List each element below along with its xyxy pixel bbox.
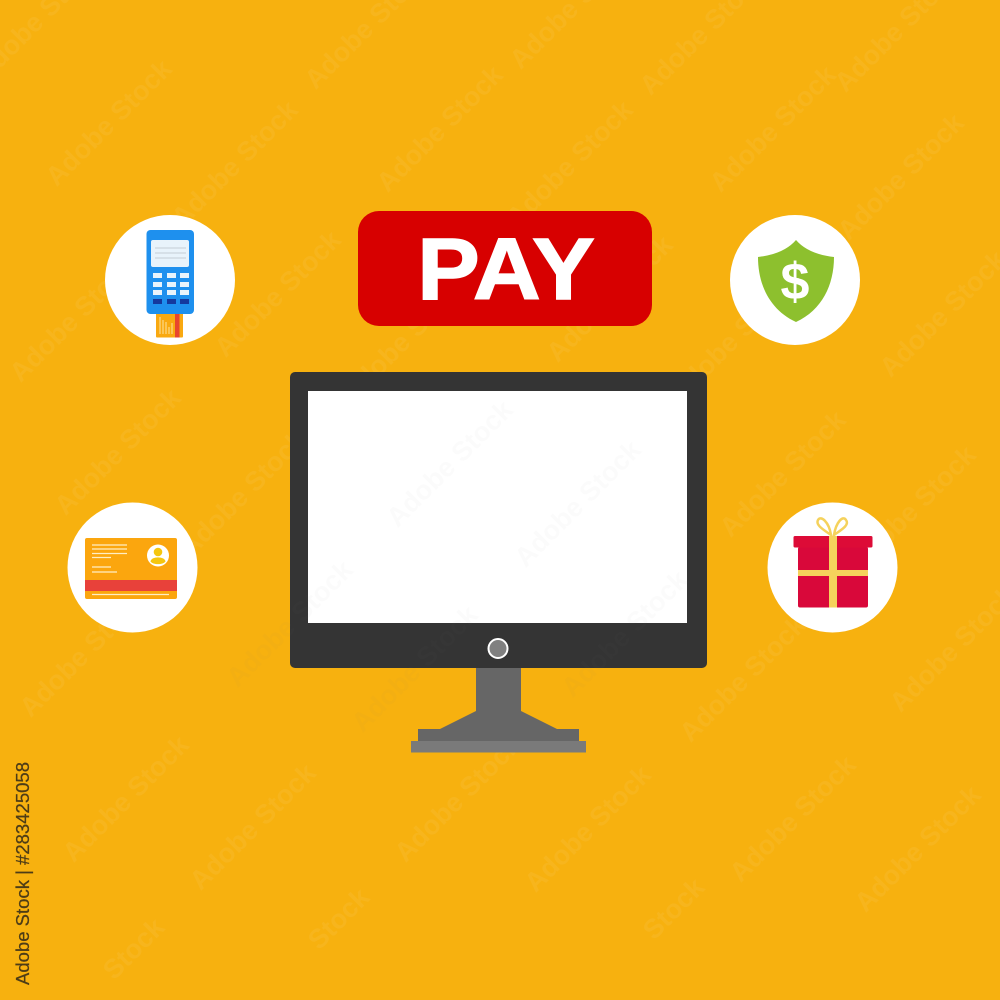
icon: credit card bbox=[68, 502, 198, 632]
text: Adobe Stock bbox=[14, 584, 152, 723]
text: Adobe Stock bbox=[832, 107, 970, 246]
card stripe bbox=[85, 580, 177, 591]
text: Adobe Stock bbox=[664, 269, 802, 408]
text: Adobe Stock bbox=[849, 779, 987, 918]
text: Adobe Stock bbox=[714, 404, 852, 543]
icon: security shield bbox=[730, 215, 860, 345]
pay label: PAY bbox=[417, 221, 595, 318]
text: Adobe Stock bbox=[174, 424, 312, 563]
text: Stock bbox=[637, 871, 711, 945]
text: Adobe Stock bbox=[57, 729, 195, 868]
text: Adobe Stock bbox=[49, 382, 187, 521]
text: Adobe Stock bbox=[704, 59, 842, 198]
text: Adobe Stock bbox=[724, 749, 862, 888]
text: Stock bbox=[97, 911, 171, 985]
text: Adobe Stock bbox=[501, 94, 639, 233]
text: Adobe Stock bbox=[674, 609, 812, 748]
dollar sign: $ bbox=[781, 253, 810, 311]
monitor screen bbox=[308, 391, 687, 623]
keypad bbox=[153, 273, 189, 304]
ribbon bbox=[798, 536, 868, 608]
watermark over monitor: Adobe Stock bbox=[221, 554, 359, 693]
text: Adobe Stock bbox=[389, 729, 527, 868]
terminal body bbox=[146, 230, 194, 314]
text: Adobe Stock bbox=[371, 59, 509, 198]
text: Adobe Stock bbox=[166, 94, 304, 233]
watermark over monitor bbox=[221, 394, 694, 738]
text: Adobe Stock bbox=[4, 249, 142, 388]
box body bbox=[798, 547, 868, 608]
watermark over monitor: Adobe Stock bbox=[381, 394, 519, 533]
text: Adobe Stock bbox=[336, 269, 474, 408]
card body bbox=[85, 538, 177, 599]
monitor body bbox=[290, 372, 707, 668]
pay button bbox=[358, 211, 652, 326]
watermark over monitor: Adobe Stock bbox=[509, 434, 647, 573]
watermark over monitor: Adobe Stock bbox=[556, 564, 694, 703]
box lid bbox=[794, 536, 872, 548]
inserted card bbox=[156, 312, 183, 338]
monitor bbox=[290, 372, 707, 752]
avatar badge bbox=[147, 544, 169, 566]
text: Adobe Stock bbox=[541, 229, 679, 368]
shield bbox=[758, 240, 834, 322]
monitor stand bbox=[411, 666, 586, 752]
text: Adobe Stock bbox=[844, 439, 982, 578]
text: Adobe Stock bbox=[40, 53, 178, 192]
text: Adobe Stock bbox=[209, 224, 347, 363]
card text lines bbox=[92, 545, 169, 594]
power button bbox=[488, 639, 508, 658]
icon: gift box bbox=[768, 502, 898, 632]
watermark over monitor: Adobe Stock bbox=[346, 599, 484, 738]
text: Stock bbox=[302, 881, 376, 955]
terminal display bbox=[151, 240, 189, 267]
stock id text: Adobe Stock | #283425058 bbox=[13, 762, 33, 985]
text: Adobe Stock bbox=[519, 759, 657, 898]
ribbon bow bbox=[817, 518, 847, 535]
icon: card terminal bbox=[105, 215, 235, 345]
text: Adobe Stock bbox=[184, 757, 322, 896]
